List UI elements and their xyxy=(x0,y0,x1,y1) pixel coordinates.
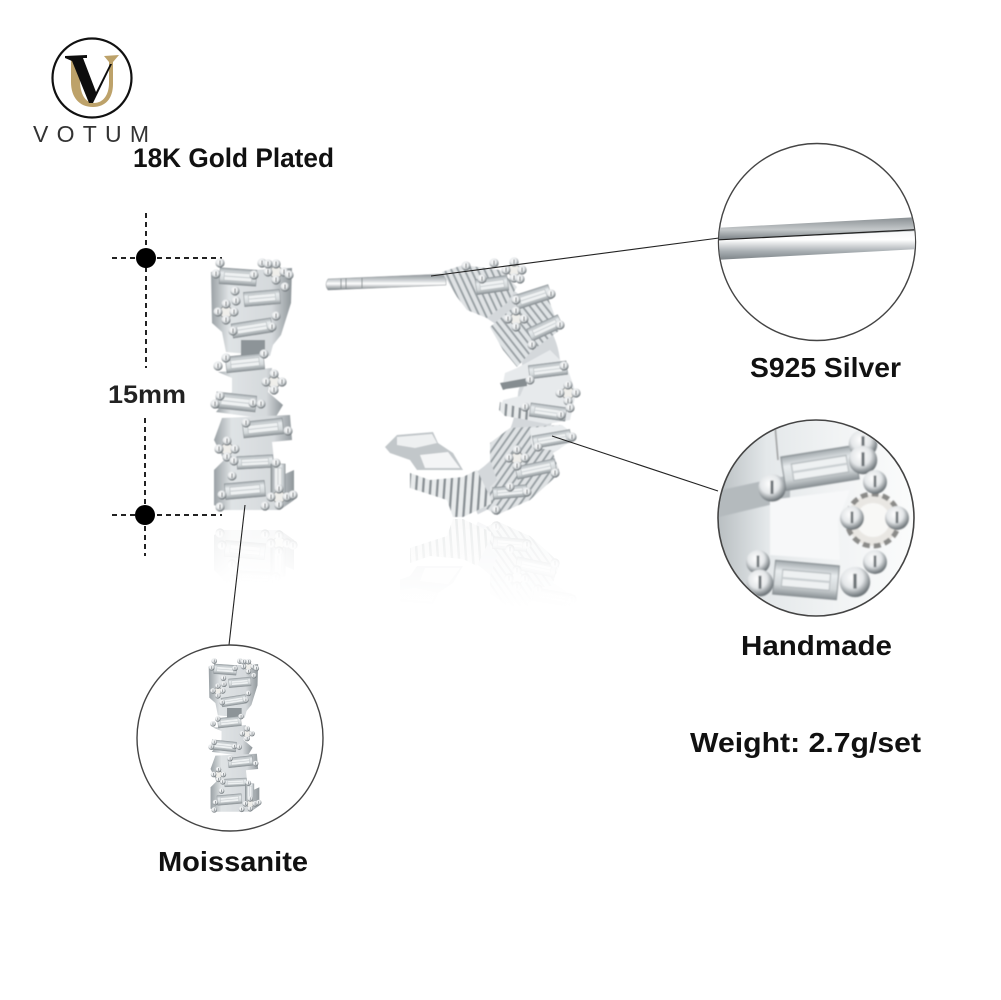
baguette stone upper xyxy=(781,446,859,490)
dimension label: 15mm xyxy=(108,381,186,409)
label: S925 Silver: S925 Silver xyxy=(750,352,901,383)
earring: front view reflection xyxy=(214,528,298,564)
earring: hoop reflection xyxy=(410,519,560,578)
panel: moissanite detail xyxy=(137,645,323,831)
round stone xyxy=(847,494,899,546)
label: Moissanite: Moissanite xyxy=(158,846,308,877)
icon: black V monogram xyxy=(65,55,112,103)
leader line to moissanite detail xyxy=(229,505,245,645)
panel: S925 silver detail xyxy=(715,144,920,340)
logo: Votum xyxy=(33,38,149,147)
dimension lines: 15mm xyxy=(108,213,222,556)
label: weight: Weight: 2.7g/set xyxy=(690,727,921,758)
earring: front view xyxy=(210,258,298,512)
earring: side view with post xyxy=(326,257,581,517)
post xyxy=(326,274,446,290)
label: Handmade: Handmade xyxy=(741,630,892,661)
leader line to silver detail xyxy=(431,238,719,276)
icon: gold U monogram xyxy=(71,55,119,107)
heading: 18K Gold Plated: 18K Gold Plated xyxy=(133,143,334,173)
baguette stone lower xyxy=(773,560,839,600)
brand name: VOTUM xyxy=(33,121,149,147)
panel: handmade detail xyxy=(712,420,914,616)
leader line to handmade detail xyxy=(552,436,718,491)
